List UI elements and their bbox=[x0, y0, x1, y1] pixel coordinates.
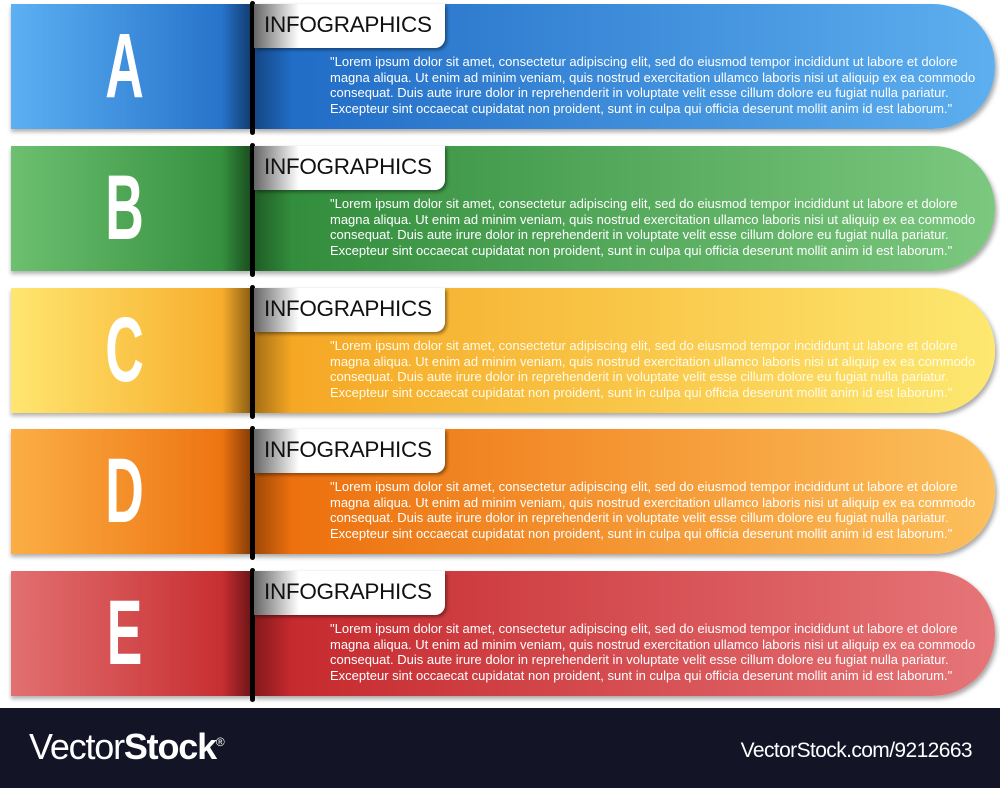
letter panel E bbox=[11, 571, 252, 696]
heading tab D bbox=[254, 429, 445, 473]
content panel C bbox=[252, 288, 995, 413]
letter panel C: C bbox=[105, 299, 144, 401]
text B bbox=[330, 196, 975, 258]
row C bbox=[8, 285, 1000, 419]
divider D bbox=[250, 426, 255, 560]
text A: "Lorem ipsum dolor sit amet, consectetur adipiscing elit, sed do eiusmod tempor incididunt ut labore et dolore bbox=[330, 54, 958, 69]
footer url: VectorStock.com/9212663 bbox=[741, 739, 972, 762]
heading tab A bbox=[254, 4, 445, 48]
text E: magna aliqua. Ut enim ad minim veniam, quis nostrud exercitation ullamco laboris nisi ut aliquip ex ea commodo bbox=[330, 637, 975, 652]
footer logo: VectorStock® bbox=[29, 726, 224, 767]
content panel A bbox=[252, 4, 995, 129]
text C: "Lorem ipsum dolor sit amet, consectetur adipiscing elit, sed do eiusmod tempor incididunt ut labore et dolore bbox=[330, 338, 958, 353]
letter panel D: D bbox=[105, 440, 144, 542]
text C: Excepteur sint occaecat cupidatat non proident, sunt in culpa qui officia deserunt mollit anim id est laborum." bbox=[330, 385, 952, 400]
letter panel B bbox=[11, 146, 252, 271]
letter panel B: B bbox=[105, 157, 144, 259]
text A: Excepteur sint occaecat cupidatat non proident, sunt in culpa qui officia deserunt mollit anim id est laborum." bbox=[330, 101, 952, 116]
text C: magna aliqua. Ut enim ad minim veniam, quis nostrud exercitation ullamco laboris nisi ut aliquip ex ea commodo bbox=[330, 354, 975, 369]
row D bbox=[8, 426, 1000, 560]
text A: consequat. Duis aute irure dolor in reprehenderit in voluptate velit esse cillum dolore eu fugiat nulla pariatur. bbox=[330, 85, 949, 100]
letter panel E: E bbox=[107, 582, 142, 684]
heading tab C bbox=[254, 288, 445, 332]
row B bbox=[8, 143, 1000, 277]
content panel E bbox=[252, 571, 995, 696]
text B: Excepteur sint occaecat cupidatat non proident, sunt in culpa qui officia deserunt mollit anim id est laborum." bbox=[330, 243, 952, 258]
letter panel C bbox=[11, 288, 252, 413]
text B: consequat. Duis aute irure dolor in reprehenderit in voluptate velit esse cillum dolore eu fugiat nulla pariatur. bbox=[330, 227, 949, 242]
heading tab E bbox=[254, 571, 445, 615]
text D: magna aliqua. Ut enim ad minim veniam, quis nostrud exercitation ullamco laboris nisi ut aliquip ex ea commodo bbox=[330, 495, 975, 510]
divider B bbox=[250, 143, 255, 277]
text A bbox=[330, 54, 975, 116]
text D: Excepteur sint occaecat cupidatat non proident, sunt in culpa qui officia deserunt mollit anim id est laborum." bbox=[330, 526, 952, 541]
text E bbox=[330, 621, 975, 683]
footer bbox=[0, 708, 1000, 788]
row A bbox=[8, 1, 1000, 135]
heading tab C: INFOGRAPHICS bbox=[264, 296, 432, 321]
divider E bbox=[250, 568, 255, 702]
letter panel D bbox=[11, 429, 252, 554]
text C: consequat. Duis aute irure dolor in reprehenderit in voluptate velit esse cillum dolore eu fugiat nulla pariatur. bbox=[330, 369, 949, 384]
text D bbox=[330, 479, 975, 541]
heading tab B bbox=[254, 146, 445, 190]
text A: magna aliqua. Ut enim ad minim veniam, quis nostrud exercitation ullamco laboris nisi ut aliquip ex ea commodo bbox=[330, 70, 975, 85]
text E: Excepteur sint occaecat cupidatat non proident, sunt in culpa qui officia deserunt mollit anim id est laborum." bbox=[330, 668, 952, 683]
divider A bbox=[250, 1, 255, 135]
letter panel A bbox=[11, 4, 252, 129]
content panel B bbox=[252, 146, 995, 271]
text E: consequat. Duis aute irure dolor in reprehenderit in voluptate velit esse cillum dolore eu fugiat nulla pariatur. bbox=[330, 652, 949, 667]
heading tab E: INFOGRAPHICS bbox=[264, 579, 432, 604]
heading tab B: INFOGRAPHICS bbox=[264, 154, 432, 179]
text B: magna aliqua. Ut enim ad minim veniam, quis nostrud exercitation ullamco laboris nisi ut aliquip ex ea commodo bbox=[330, 212, 975, 227]
heading tab D: INFOGRAPHICS bbox=[264, 437, 432, 462]
text D: consequat. Duis aute irure dolor in reprehenderit in voluptate velit esse cillum dolore eu fugiat nulla pariatur. bbox=[330, 510, 949, 525]
text D: "Lorem ipsum dolor sit amet, consectetur adipiscing elit, sed do eiusmod tempor incididunt ut labore et dolore bbox=[330, 479, 958, 494]
letter panel A: A bbox=[105, 15, 144, 117]
text C bbox=[330, 338, 975, 400]
row E bbox=[8, 568, 1000, 702]
heading tab A: INFOGRAPHICS bbox=[264, 12, 432, 37]
divider C bbox=[250, 285, 255, 419]
text E: "Lorem ipsum dolor sit amet, consectetur adipiscing elit, sed do eiusmod tempor incididunt ut labore et dolore bbox=[330, 621, 958, 636]
content panel D bbox=[252, 429, 995, 554]
text B: "Lorem ipsum dolor sit amet, consectetur adipiscing elit, sed do eiusmod tempor incididunt ut labore et dolore bbox=[330, 196, 958, 211]
